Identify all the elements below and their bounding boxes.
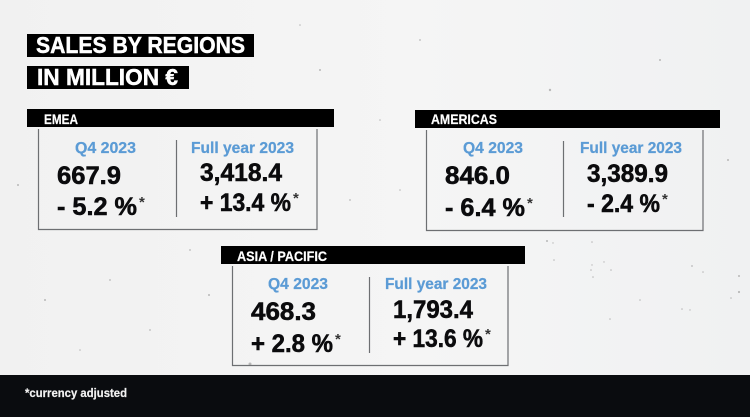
panel frame <box>232 266 508 366</box>
Full year 2023 figures: * <box>293 190 299 207</box>
panel frame <box>426 130 703 230</box>
Full year 2023 figures <box>191 140 299 217</box>
title <box>27 32 254 90</box>
panel header: EMEA <box>27 109 334 127</box>
Q4 2023 figures: Q4 2023 <box>268 276 328 293</box>
Q4 2023 figures: + 2.8 % <box>251 330 333 358</box>
Full year 2023 figures: + 13.4 % <box>200 189 291 217</box>
Full year 2023 figures: * <box>662 191 668 208</box>
Q4 2023 figures: - 5.2 % <box>57 193 137 221</box>
title: SALES BY REGIONS <box>36 32 245 58</box>
Full year 2023 figures: Full year 2023 <box>385 276 487 293</box>
Q4 2023 figures: * <box>139 194 145 211</box>
panel: Asia / Pacific <box>221 246 525 366</box>
Q4 2023 figures: 667.9 <box>57 162 121 190</box>
panel frame <box>38 129 317 230</box>
Full year 2023 figures: Full year 2023 <box>580 140 682 157</box>
Q4 2023 figures <box>445 140 533 222</box>
title: IN MILLION € <box>37 64 178 90</box>
footer bar with footnote: *currency adjusted <box>25 388 127 400</box>
Full year 2023 figures: 3,389.9 <box>587 160 668 188</box>
panel header: Americas <box>415 110 720 128</box>
panel header: Asia / Pacific: ASIA / PACIFIC <box>237 248 327 264</box>
Q4 2023 figures: Q4 2023 <box>75 140 136 157</box>
Full year 2023 figures: + 13.6 % <box>393 325 483 353</box>
Full year 2023 figures <box>385 276 491 353</box>
Q4 2023 figures: 846.0 <box>445 162 510 190</box>
Q4 2023 figures: * <box>335 331 341 348</box>
Full year 2023 figures: 1,793.4 <box>393 296 473 324</box>
panel: EMEA <box>27 109 334 230</box>
Full year 2023 figures: 3,418.4 <box>200 159 282 187</box>
Full year 2023 figures: - 2.4 % <box>587 190 660 218</box>
Full year 2023 figures: Full year 2023 <box>191 140 294 157</box>
Full year 2023 figures: * <box>485 326 491 343</box>
Q4 2023 figures <box>57 140 145 221</box>
Q4 2023 figures: * <box>527 195 533 212</box>
Q4 2023 figures <box>251 276 341 358</box>
Q4 2023 figures: - 6.4 % <box>445 194 525 222</box>
footer bar with footnote <box>0 375 750 417</box>
Q4 2023 figures: 468.3 <box>251 298 316 326</box>
panel: Americas <box>415 110 720 230</box>
panel header: Americas: AMERICAS <box>431 111 497 127</box>
panel header: EMEA: EMEA <box>44 111 78 127</box>
panel header: Asia / Pacific <box>221 246 525 264</box>
Q4 2023 figures: Q4 2023 <box>463 140 523 157</box>
Full year 2023 figures <box>580 140 682 218</box>
